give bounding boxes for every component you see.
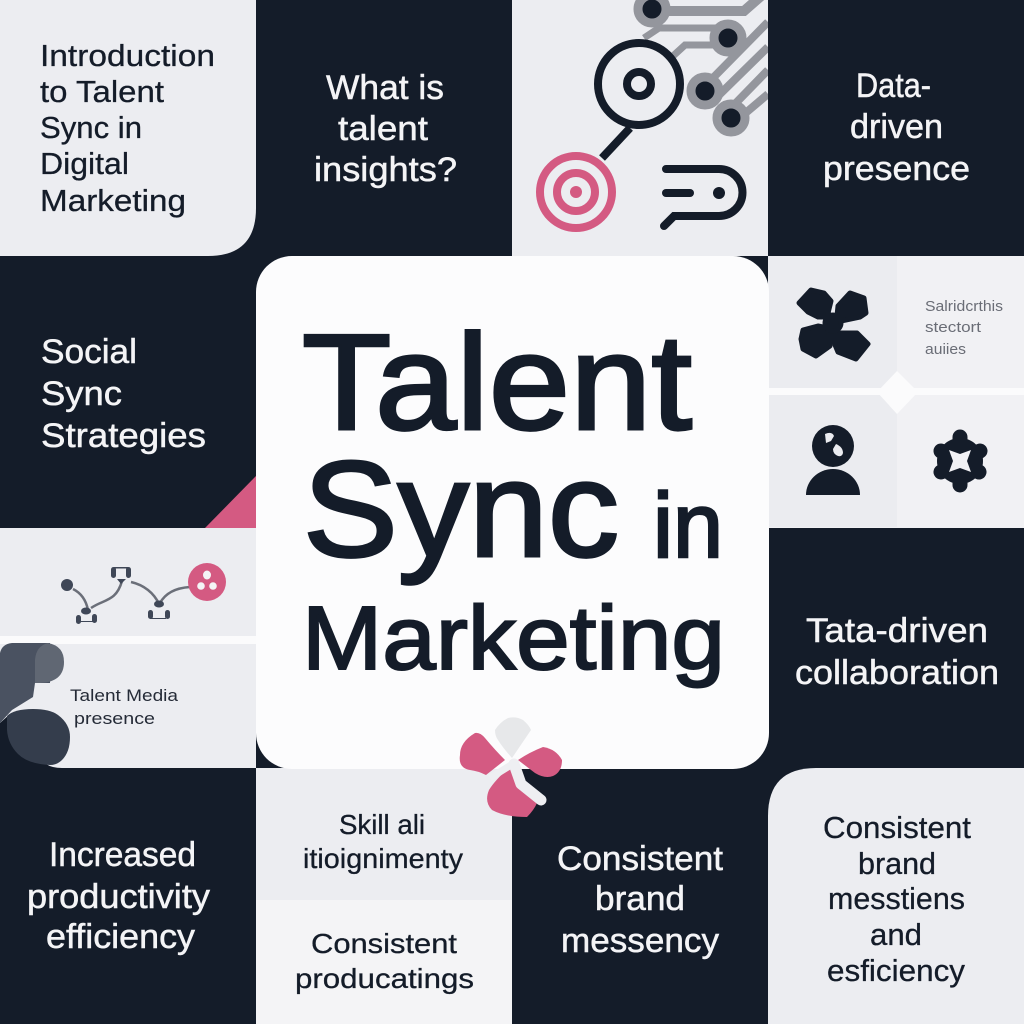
panel: introduction — [0, 0, 256, 256]
text: skill alignment: itioignimenty — [303, 843, 463, 874]
text: social sync strategies: Social — [41, 333, 137, 371]
text: consistent brand messtiens: esficiency — [827, 953, 966, 988]
text: small section note: stectort — [925, 319, 982, 336]
icon: overlapping slate shapes — [0, 643, 70, 768]
text: small section note: auiies — [925, 341, 966, 358]
title: in — [653, 475, 723, 577]
text: talent media presence: Talent Media — [70, 687, 179, 705]
panel: icon cluster — [512, 0, 769, 256]
panel: central title card — [256, 256, 769, 769]
divider: white strip — [0, 636, 256, 644]
text: consistent producatings: producatings — [295, 963, 474, 994]
icon: pink bullseye — [540, 156, 612, 228]
text: introduction heading: to Talent — [40, 74, 164, 109]
text: consistent brand messtiens: brand — [858, 846, 936, 881]
icon: chat bubble — [664, 169, 742, 226]
text: what is talent insights: insights? — [314, 151, 457, 189]
panel: skill alignment — [256, 768, 512, 900]
text: introduction heading: Digital — [40, 146, 129, 181]
accent: pink corner triangle — [205, 476, 256, 528]
title: Talent — [302, 306, 692, 458]
icon: person — [806, 425, 860, 495]
icon: white diamond — [877, 371, 918, 414]
icon: pink flower — [460, 717, 562, 817]
text: what is talent insights: talent — [338, 110, 429, 148]
text: consistent brand messency: Consistent — [557, 840, 724, 878]
panel: consistent brand messency — [512, 768, 768, 1024]
panel: talent media presence — [0, 643, 256, 768]
text: consistent brand messency: brand — [595, 880, 685, 918]
icon: connected nodes — [61, 563, 226, 624]
panel: social sync strategies — [0, 256, 256, 528]
text: consistent brand messtiens: and — [870, 917, 922, 952]
text: skill alignment: Skill ali — [339, 809, 425, 840]
text: data-driven presence: Data- — [856, 67, 931, 105]
icon: circuit traces — [638, 0, 768, 132]
text: increased productivity efficiency: efficiency — [46, 918, 195, 956]
panel: what is talent insights — [256, 0, 512, 256]
text: introduction heading: Introduction — [40, 38, 215, 73]
title: Sync — [303, 433, 619, 585]
panel: cross icons grid — [768, 256, 1024, 528]
icon: four petal shape — [799, 290, 868, 359]
panel: increased productivity — [0, 768, 256, 1024]
text: what is talent insights: What is — [326, 69, 444, 107]
text: data-driven presence: presence — [823, 150, 970, 188]
text: small section note: Salridcrthis — [925, 298, 1003, 315]
panel: data-driven presence — [768, 0, 1024, 256]
icon: magnifier target — [598, 43, 680, 158]
panel: consistent brand messtiens — [768, 768, 1024, 1024]
text: tata-driven collaboration: Tata-driven — [806, 612, 988, 650]
text: introduction heading: Marketing — [40, 183, 186, 218]
panel: tata-driven collaboration — [768, 528, 1024, 768]
icon: six lobed gear — [937, 437, 983, 485]
text: data-driven presence: driven — [850, 108, 943, 146]
text: social sync strategies: Sync — [41, 375, 122, 413]
panel: consistent producatings — [256, 900, 512, 1024]
text: increased productivity efficiency: productivity — [27, 878, 210, 916]
text: consistent brand messtiens: Consistent — [823, 810, 971, 845]
text: introduction heading: Sync in — [40, 110, 142, 145]
title: Marketing — [302, 589, 725, 689]
text: consistent brand messency: messency — [561, 922, 719, 960]
text: tata-driven collaboration: collaboration — [795, 654, 999, 692]
text: social sync strategies: Strategies — [41, 417, 206, 455]
panel: network path — [0, 528, 256, 636]
text: consistent producatings: Consistent — [311, 928, 457, 959]
text: increased productivity efficiency: Increased — [49, 836, 196, 874]
text: talent media presence: presence — [74, 710, 155, 728]
text: consistent brand messtiens: messtiens — [828, 881, 965, 916]
